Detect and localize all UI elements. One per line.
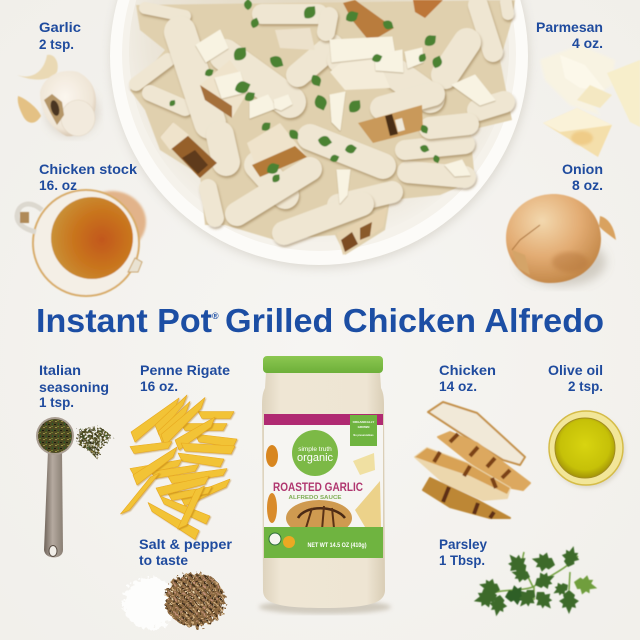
icon: salt pile — [123, 577, 177, 629]
ingredient: onion — [506, 161, 616, 286]
label: penne rigate: 16 oz. — [140, 378, 178, 394]
ingredient: parmesan — [536, 19, 640, 157]
plate — [110, 0, 529, 268]
organically grown badge: No preservatives — [353, 434, 374, 437]
icon: bowl of olive oil — [549, 411, 625, 488]
label: parmesan: Parmesan — [536, 19, 603, 35]
label: italian seasoning: Italian — [39, 362, 81, 378]
organically grown badge — [350, 415, 377, 446]
grilled chicken pieces — [160, 0, 443, 255]
product: alfredo sauce jar — [259, 356, 391, 614]
net weight: NET WT 14.5 OZ (410g) — [308, 543, 366, 549]
label: garlic: 2 tsp. — [39, 36, 74, 52]
penne pasta — [136, 2, 508, 233]
ingredient: italian seasoning — [36, 362, 112, 558]
icon: garlic bulb and cloves — [17, 55, 98, 136]
icon: yellow onion — [506, 194, 616, 286]
parmesan shavings — [196, 30, 495, 203]
pasta base — [130, 0, 515, 255]
icon: sliced grilled chicken — [415, 402, 530, 518]
jar body — [262, 372, 385, 608]
title: ® — [212, 311, 219, 321]
ingredient: olive oil — [548, 362, 625, 488]
label: chicken: 14 oz. — [439, 378, 477, 394]
brand logo: simple truth — [298, 446, 332, 453]
icon: dry penne pile — [120, 395, 237, 540]
label: chicken stock: Chicken stock — [39, 161, 137, 177]
label: parmesan: 4 oz. — [572, 35, 603, 51]
product subtitle: ALFREDO SAUCE — [288, 495, 342, 501]
icon: measuring cup of stock — [17, 190, 146, 296]
icon: parmesan wedge and shavings — [540, 45, 640, 157]
label: onion: 8 oz. — [572, 177, 603, 193]
title: Grilled Chicken Alfredo — [225, 302, 604, 339]
icon: measuring spoon with seasoning — [36, 417, 112, 558]
label: salt and pepper: Salt & pepper — [139, 536, 233, 552]
jar label — [264, 414, 383, 558]
jar lid — [263, 356, 383, 373]
title: Instant Pot — [36, 302, 212, 339]
ingredient: salt and pepper — [123, 536, 233, 629]
jar shadow — [259, 600, 391, 614]
label: parsley: Parsley — [439, 536, 487, 552]
organic seals — [269, 533, 295, 548]
organically grown badge: ORGANICALLY — [353, 420, 374, 424]
ingredient: chicken stock — [17, 161, 146, 296]
green label band — [264, 527, 383, 558]
label: onion: Onion — [562, 161, 603, 177]
label photo: roasted garlic — [266, 445, 381, 536]
label: chicken stock: 16. oz — [39, 177, 77, 193]
label: salt and pepper: to taste — [139, 552, 188, 568]
label: italian seasoning: seasoning — [39, 379, 109, 395]
icon: parsley sprig — [471, 544, 600, 618]
icon: pepper pile — [165, 573, 225, 627]
label: parsley: 1 Tbsp. — [439, 552, 485, 568]
label: penne rigate: Penne Rigate — [140, 362, 230, 378]
brand logo — [292, 430, 338, 476]
brand logo: organic — [297, 452, 334, 464]
parsley garnish — [168, 0, 444, 184]
ingredient: penne rigate — [120, 362, 237, 540]
organically grown badge: GROWN — [358, 425, 369, 429]
label stripe — [264, 414, 383, 425]
label: garlic: Garlic — [39, 19, 81, 35]
ingredient: parsley — [439, 536, 600, 618]
product name: ROASTED GARLIC — [273, 482, 363, 494]
ingredient: chicken — [415, 362, 530, 518]
label: italian seasoning: 1 tsp. — [39, 394, 74, 410]
label: olive oil: 2 tsp. — [568, 378, 603, 394]
plate of grilled chicken alfredo — [110, 0, 529, 268]
title — [36, 302, 604, 339]
label: olive oil: Olive oil — [548, 362, 603, 378]
label: chicken: Chicken — [439, 362, 496, 378]
ingredient: garlic — [17, 19, 98, 136]
pasta and toppings — [130, 0, 515, 255]
